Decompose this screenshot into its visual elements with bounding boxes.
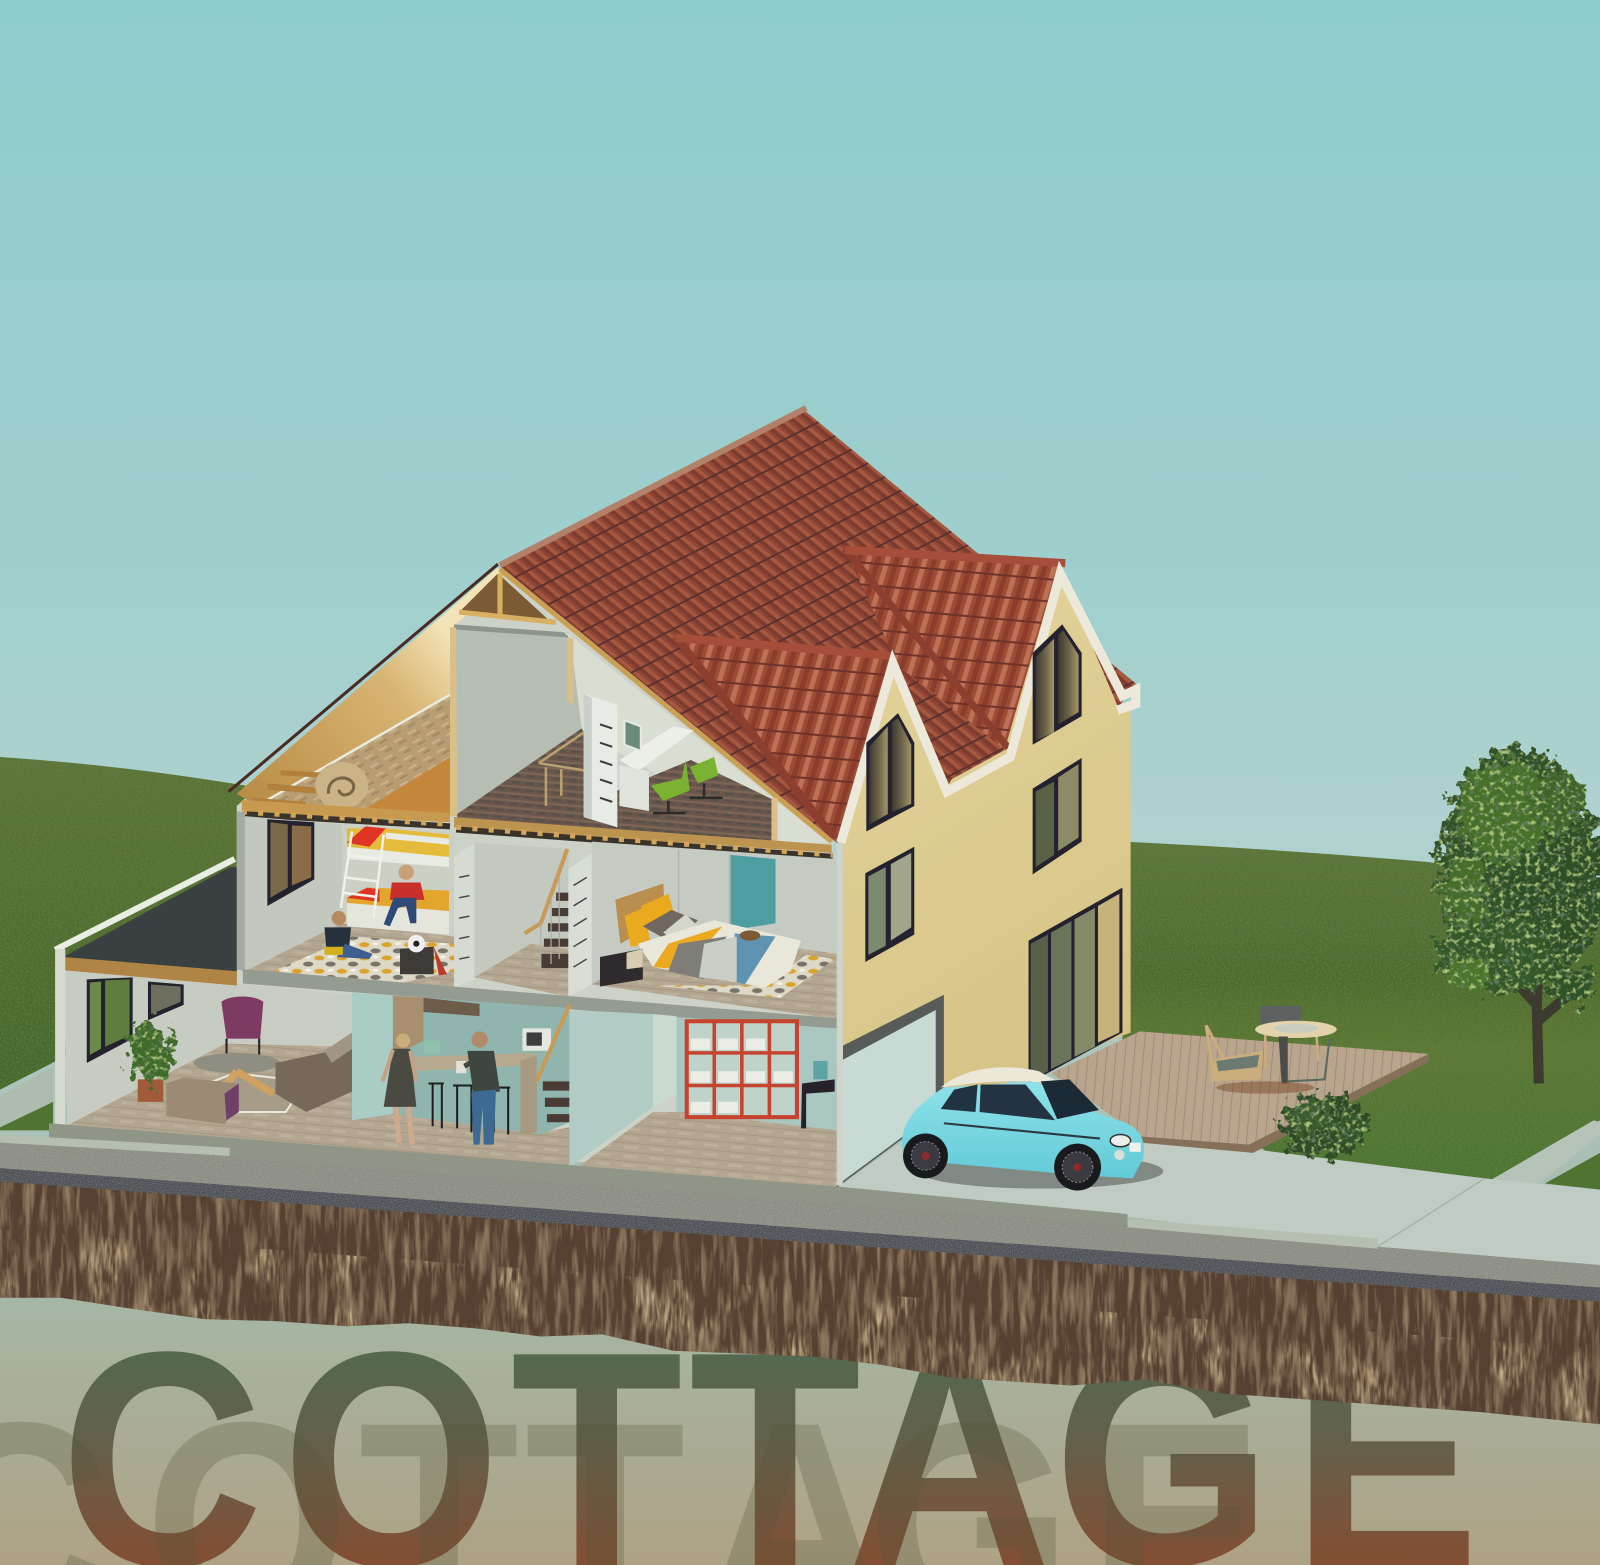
soil golden patches (0, 1229, 1600, 1424)
loft back wall (556, 624, 829, 843)
workbench (801, 1061, 835, 1128)
gravel strip (0, 1141, 1600, 1290)
dark gravel edge (0, 1168, 1600, 1302)
purple armchair (221, 996, 263, 1055)
bedroom (592, 842, 837, 1019)
cream side wall (839, 573, 1131, 1112)
terrace deck (1051, 1006, 1429, 1153)
attic backing (237, 571, 833, 1183)
left lawn (0, 757, 245, 1090)
stair door (568, 853, 592, 997)
main roof tiles (500, 410, 1136, 843)
annex window (87, 977, 184, 1063)
red shelving (687, 1021, 797, 1117)
ground floor (63, 969, 837, 1188)
loft partition wall (455, 629, 582, 814)
annex side wall (63, 969, 237, 1125)
soil cross-section (0, 1168, 1600, 1424)
cross-section: attic left (229, 564, 504, 822)
table and chairs (1206, 1006, 1337, 1094)
boy sitting on floor (324, 911, 372, 959)
insulation roll (315, 762, 368, 809)
window: middle right (1033, 758, 1082, 874)
window: patio doors (1029, 888, 1122, 1083)
white fascia boards (841, 573, 1136, 843)
concrete plinth (0, 1123, 1378, 1249)
woman (383, 1033, 416, 1145)
coffee table and white rug (171, 1053, 306, 1112)
tree trunk and branches (1500, 918, 1587, 1083)
brown sofa (276, 1032, 352, 1112)
green office chairs (651, 740, 722, 813)
right sidewalk (1492, 1120, 1600, 1190)
tan armchair (166, 1077, 239, 1124)
car shadow (918, 1154, 1163, 1189)
teal kitchen wall (352, 993, 393, 1130)
rug with hexagons (273, 937, 454, 983)
garage floor (578, 1112, 837, 1188)
loft room (450, 624, 829, 843)
garage back wall (677, 1017, 837, 1134)
kitchen floor (352, 1114, 569, 1167)
kids room side wall (245, 816, 342, 971)
car headlight and plate (1110, 1134, 1141, 1160)
bed (615, 884, 801, 988)
bedroom floor (592, 930, 837, 1019)
annex back wall (226, 983, 352, 1048)
car windows (941, 1079, 1099, 1120)
boy sitting on bunk (384, 865, 424, 926)
loft floor (457, 728, 773, 843)
bunk bed (341, 826, 449, 935)
window: upper left (866, 713, 914, 831)
kitchen counter (411, 1041, 537, 1134)
window: upper right (1033, 624, 1082, 745)
bush (1282, 1093, 1367, 1158)
upper floor slab (243, 969, 837, 1030)
tree crown (1436, 747, 1600, 1005)
car roof (941, 1067, 1061, 1088)
driveway (837, 1107, 1600, 1267)
central partition (569, 1010, 653, 1167)
cross-section: roof truss (454, 569, 832, 842)
toy box and ball (400, 935, 447, 975)
kids room (237, 811, 474, 988)
tree (1436, 747, 1600, 1083)
car side stripe (944, 1123, 1100, 1139)
stairs by the kitchen (537, 1005, 569, 1122)
floor joists upper (242, 812, 833, 857)
partition door (653, 1014, 677, 1108)
door panel (454, 843, 474, 988)
left path and small lawn (0, 1066, 53, 1130)
kids room floor (245, 923, 454, 988)
ground floor planks (67, 1044, 569, 1167)
man (456, 1031, 500, 1145)
loft door (584, 694, 617, 827)
kids room back wall (342, 824, 454, 937)
kids room window (267, 819, 314, 906)
right lawn (1122, 842, 1600, 1180)
stair rail (539, 733, 584, 806)
flat roof annex (55, 859, 237, 1127)
window: middle left (865, 847, 914, 962)
stairwell (474, 843, 592, 997)
desk (619, 720, 694, 811)
garage door (837, 995, 944, 1188)
windows on side wall (865, 624, 1122, 1083)
bedroom walls (592, 842, 837, 985)
wall corner trim (837, 843, 843, 1185)
rear gable tiles (845, 549, 1065, 777)
roof ridge cap (500, 408, 806, 565)
front gable tiles (676, 637, 894, 839)
car (902, 1067, 1163, 1191)
nightstand (600, 949, 643, 987)
potted plant (128, 1021, 172, 1102)
shower glass (731, 855, 776, 930)
kitchen back wall (393, 996, 569, 1134)
car wheels (903, 1133, 1101, 1191)
main roof valley segment (898, 665, 1005, 784)
rug (653, 955, 835, 998)
car body (902, 1081, 1144, 1178)
